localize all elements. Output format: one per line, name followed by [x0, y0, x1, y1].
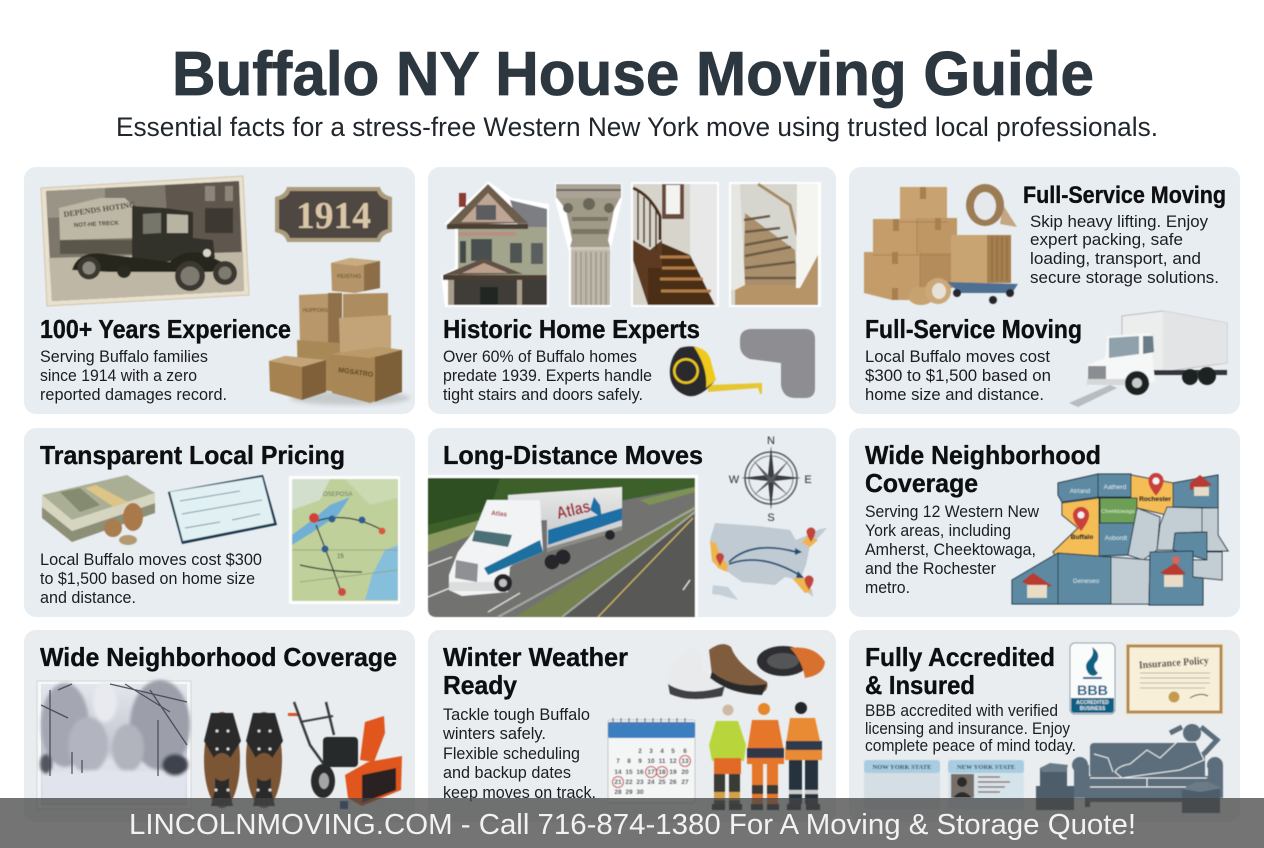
icon: stacked wooden crates: MGSATRO	[338, 367, 374, 379]
icon: calendar with circled dates: 21	[614, 779, 622, 786]
icon: stacked wooden crates: PEISTHG	[337, 274, 361, 280]
icon: 1914 plaque: 1914	[296, 195, 371, 237]
icon: tape measure	[670, 346, 762, 396]
icon: calendar with circled dates: 7	[616, 758, 620, 765]
icon: snow blower	[288, 702, 402, 809]
heading: Wide Neighborhood	[865, 440, 1101, 470]
icon: calendar with circled dates: 22	[625, 779, 633, 786]
icon: calendar with circled dates: 30	[636, 789, 644, 796]
description	[865, 702, 1076, 755]
icon: compass rose: E	[804, 474, 812, 486]
map pins and houses	[1022, 473, 1212, 598]
icon: stacked wooden crates	[269, 258, 410, 405]
heading	[865, 440, 1101, 498]
photo: victorian house	[441, 181, 549, 307]
icon: cardboard boxes and dolly	[864, 184, 1018, 305]
description: predate 1939. Experts handle	[443, 367, 652, 385]
map: route from Buffalo: 15	[337, 554, 344, 560]
icon: calendar with circled dates	[608, 718, 695, 803]
photo: Atlas truck on highway: Atlas	[555, 497, 592, 523]
title: Buffalo NY House Moving Guide	[172, 40, 1094, 109]
heading: Winter Weather	[443, 642, 628, 672]
icon: compass rose: S	[767, 512, 775, 524]
icon: insurance policy certificate	[1125, 643, 1224, 715]
icon: calendar with circled dates: 25	[658, 779, 666, 786]
photo: corinthian column	[555, 183, 622, 307]
heading: Historic Home Experts	[443, 314, 700, 344]
heading: top: Full-Service Moving	[1023, 182, 1226, 209]
subtitle: Essential facts for a stress-free Western New York move using trusted local professionals.	[116, 112, 1158, 142]
icon: calendar with circled dates: 17	[647, 769, 655, 776]
photo: Atlas truck on highway: Atlas	[491, 510, 508, 518]
icon: BBB accredited badge: BBB	[1077, 682, 1108, 698]
icon: calendar with circled dates: 23	[636, 779, 644, 786]
photo: vintage moving truck	[41, 176, 249, 306]
map labels: Atrland	[1070, 488, 1091, 495]
photo: vintage moving truck: DEPENDS HOTING	[63, 200, 136, 219]
heading	[443, 642, 628, 700]
description: Serving 12 Western New	[865, 503, 1039, 521]
icon: calendar with circled dates: 24	[647, 779, 655, 786]
description: keep moves on track.	[443, 784, 596, 802]
heading: Transparent Local Pricing	[40, 440, 345, 470]
map labels: Rochester	[1139, 496, 1171, 503]
photo: wooden staircase	[631, 182, 719, 307]
icon: three winter workers	[709, 702, 822, 810]
icon: calendar with circled dates: 19	[669, 769, 677, 776]
description: bottom: Local Buffalo moves cost	[865, 348, 1050, 366]
heading: bottom: Full-Service Moving	[865, 314, 1082, 344]
icon: compass rose: N	[767, 435, 775, 447]
description: to $1,500 based on home size	[40, 570, 255, 588]
map: route from Buffalo: OSEPOSA	[323, 492, 352, 498]
heading	[865, 642, 1055, 700]
map labels: Geneseo	[1073, 578, 1100, 585]
heading: & Insured	[865, 670, 975, 700]
icon: compass rose	[729, 435, 812, 524]
icon: license cards: NEW YORK STATE	[957, 764, 1015, 771]
icon: 1914 plaque	[275, 187, 392, 242]
description	[442, 706, 596, 802]
description: and the Rochester	[865, 560, 996, 578]
heading: Wide Neighborhood Coverage	[40, 642, 397, 672]
map: route from Buffalo	[289, 476, 400, 604]
panel: long-distance moves	[428, 428, 836, 617]
icon: calendar with circled dates: 16	[636, 769, 644, 776]
description: top: secure storage solutions.	[1030, 269, 1219, 287]
description: metro.	[865, 579, 910, 597]
panel: fully accredited and insured	[849, 630, 1240, 822]
description: top	[1030, 213, 1219, 287]
photo: snowy street	[37, 680, 191, 809]
icon: bank check	[168, 475, 277, 544]
icon: gray corner protector	[740, 329, 815, 398]
icon: calendar with circled dates: 6	[683, 748, 687, 755]
heading: Long-Distance Moves	[443, 440, 703, 470]
description: Serving Buffalo families	[40, 348, 208, 366]
map labels	[1070, 484, 1171, 585]
icon: compass rose: W	[729, 474, 740, 486]
description: bottom: home size and distance.	[865, 386, 1044, 404]
icon: calendar with circled dates: 14	[614, 769, 622, 776]
description: and backup dates	[443, 764, 571, 782]
icon: calendar with circled dates: 28	[614, 789, 622, 796]
icon: calendar with circled dates: 20	[681, 769, 689, 776]
icon: calendar with circled dates: 5	[671, 748, 675, 755]
icon: ice cleats	[204, 712, 283, 808]
heading: Fully Accredited	[865, 642, 1055, 672]
heading: Coverage	[865, 468, 978, 498]
description: Tackle tough Buffalo	[443, 706, 590, 724]
icon: calendar with circled dates: 3	[649, 748, 653, 755]
photo: vintage moving truck: NOT-HE TRECK	[74, 221, 120, 229]
icon: calendar with circled dates: 11	[659, 758, 666, 765]
description: bottom: $300 to $1,500 based on	[865, 367, 1051, 385]
panel: 100+ years experience	[24, 167, 415, 414]
heading: 100+ Years Experience	[40, 314, 291, 344]
description: complete peace of mind today.	[865, 737, 1076, 755]
panel: transparent local pricing	[24, 428, 415, 617]
icon: license cards: NOW YORK STATE	[872, 764, 932, 771]
description	[865, 503, 1039, 597]
description: Amherst, Cheektowaga,	[865, 541, 1036, 559]
map labels: Buffalo	[1071, 534, 1093, 541]
icon: stacked wooden crates: HUPPORS	[303, 308, 328, 314]
description: and distance.	[40, 589, 136, 607]
description: Over 60% of Buffalo homes	[443, 348, 637, 366]
panel: wide neighborhood coverage (map)	[849, 428, 1240, 617]
icon: winter boots	[667, 644, 825, 700]
description: York areas, including	[865, 522, 1011, 540]
icon: relaxing person on sofa with boxes	[1036, 724, 1223, 813]
icon: BBB accredited badge: ACCREDITED	[1076, 700, 1109, 706]
description	[40, 348, 227, 404]
map labels: Aatherd	[1104, 484, 1127, 491]
map: Western New York regions	[1012, 474, 1228, 605]
footer text: LINCOLNMOVING.COM - Call 716-874-1380 For A Moving & Storage Quote!	[129, 809, 1136, 841]
description: top: Skip heavy lifting. Enjoy	[1030, 213, 1209, 231]
icon: calendar with circled dates: 9	[638, 758, 642, 765]
icon: calendar with circled dates: 29	[625, 789, 633, 796]
description: Local Buffalo moves cost $300	[40, 551, 262, 569]
icon: white box truck with ramp	[1069, 311, 1227, 407]
icon: calendar with circled dates: 12	[669, 758, 677, 765]
panel: winter weather ready	[428, 630, 836, 822]
icon: insurance policy certificate: Insurance Policy	[1139, 656, 1210, 671]
icon: license cards	[864, 760, 1024, 809]
description: BBB accredited with verified	[865, 702, 1058, 720]
icon: calendar with circled dates: 2	[638, 748, 642, 755]
map labels: Cheektowaga	[1101, 509, 1136, 515]
description: top: expert packing, safe	[1030, 231, 1183, 249]
icon: calendar with circled dates: 18	[658, 769, 666, 776]
photo: narrow stairwell	[729, 182, 821, 307]
description	[40, 551, 262, 607]
map labels: Asbordt	[1105, 535, 1127, 542]
description: licensing and insurance. Enjoy	[865, 720, 1071, 738]
icon: calendar with circled dates: 8	[627, 758, 631, 765]
icon: calendar with circled dates: 26	[669, 779, 677, 786]
description: reported damages record.	[40, 386, 227, 404]
icon: calendar with circled dates: 13	[681, 758, 689, 765]
heading: Ready	[443, 670, 518, 700]
icon: calendar with circled dates: 10	[647, 758, 655, 765]
panel: wide neighborhood coverage (winter photo)	[24, 630, 415, 822]
description: Flexible scheduling	[443, 745, 580, 763]
icon: cash stacks and coins	[42, 475, 155, 545]
description: since 1914 with a zero	[40, 367, 197, 385]
panel: full-service moving	[849, 167, 1240, 414]
description	[443, 348, 652, 404]
map: US long-distance routes	[710, 523, 827, 600]
description: top: loading, transport, and	[1030, 250, 1201, 268]
footer call-to-action bar	[0, 798, 1264, 848]
photo: Atlas truck on highway	[428, 475, 698, 617]
icon: calendar with circled dates: 27	[681, 779, 689, 786]
icon: calendar with circled dates: 4	[660, 748, 664, 755]
description: winters safely.	[442, 725, 546, 743]
panel: historic home experts	[428, 167, 836, 414]
icon: BBB accredited badge	[1070, 643, 1115, 714]
icon: BBB accredited badge: BUSINESS	[1080, 706, 1106, 712]
description: bottom	[865, 348, 1051, 404]
icon: calendar with circled dates: 15	[625, 769, 633, 776]
description: tight stairs and doors safely.	[443, 386, 643, 404]
